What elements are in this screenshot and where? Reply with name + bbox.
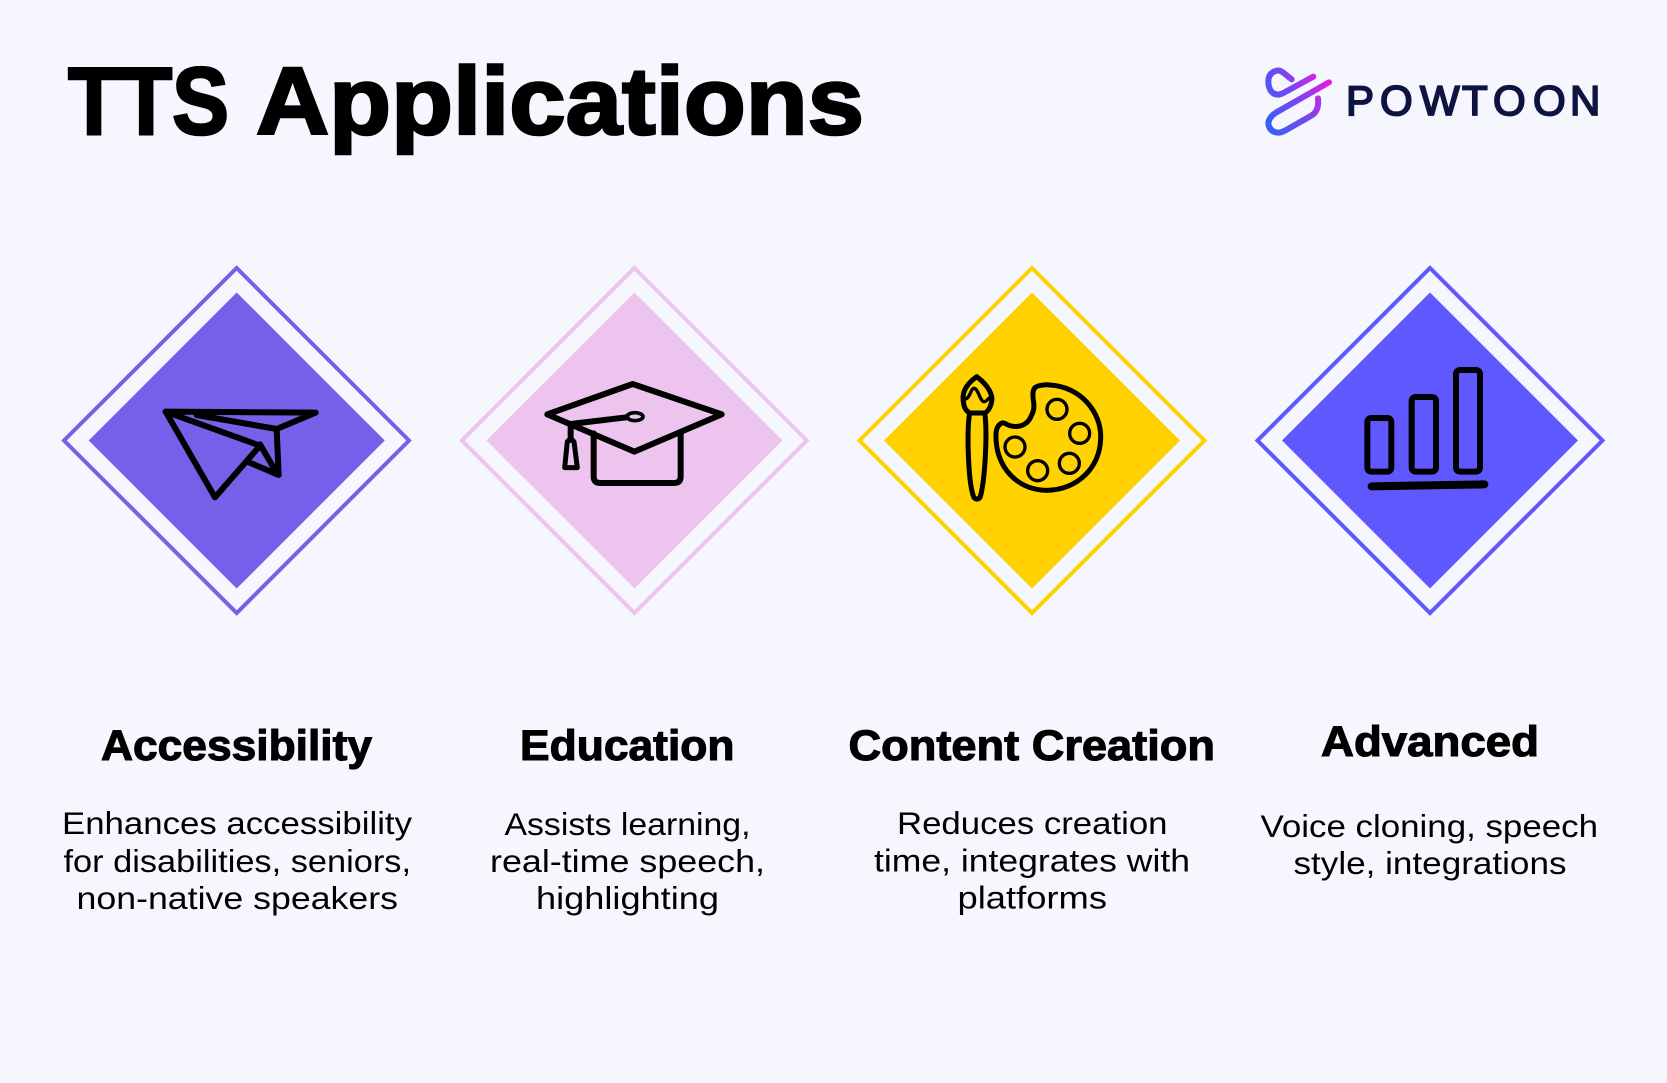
panel: Accessibility bbox=[62, 268, 412, 916]
description: Content Creation: Reduces creation bbox=[897, 805, 1168, 841]
description: Accessibility bbox=[62, 805, 412, 916]
diamond: Content Creation bbox=[860, 268, 1204, 613]
heading: Content Creation: Content Creation bbox=[848, 722, 1215, 770]
logo wordmark: POWTOON bbox=[1346, 77, 1600, 124]
description: Content Creation: time, integrates with bbox=[874, 842, 1190, 878]
title: TTS bbox=[68, 48, 229, 155]
icon: Powtoon mark bbox=[1268, 71, 1329, 133]
description: Accessibility: for disabilities, seniors, bbox=[64, 843, 411, 879]
description: Accessibility: Enhances accessibility bbox=[62, 805, 412, 841]
description: Advanced bbox=[1260, 808, 1598, 881]
description: Advanced: Voice cloning, speech bbox=[1260, 808, 1598, 844]
heading: Accessibility: Accessibility bbox=[101, 722, 372, 770]
diamond: Advanced bbox=[1258, 268, 1602, 613]
diamond: Accessibility bbox=[64, 268, 409, 613]
description: Education: highlighting bbox=[536, 880, 719, 916]
description: Accessibility: non-native speakers bbox=[76, 880, 398, 916]
description: Content Creation bbox=[874, 805, 1190, 916]
panel: Content Creation bbox=[848, 268, 1215, 916]
title: Applications bbox=[256, 48, 864, 155]
logo: Powtoon bbox=[1268, 71, 1600, 133]
icon: bar chart bbox=[1367, 370, 1484, 486]
icon: graduation cap bbox=[547, 384, 722, 483]
description: Education: real-time speech, bbox=[490, 843, 765, 879]
description: Education bbox=[490, 806, 765, 916]
panel: Advanced bbox=[1258, 268, 1602, 881]
description: Content Creation: platforms bbox=[958, 880, 1107, 916]
panel: Education bbox=[462, 268, 807, 916]
description: Advanced: style, integrations bbox=[1294, 845, 1566, 881]
icon: paper plane bbox=[166, 412, 316, 497]
heading: Education: Education bbox=[520, 722, 734, 770]
heading: Advanced: Advanced bbox=[1321, 718, 1539, 766]
icon: paint brush and palette bbox=[963, 377, 1101, 499]
diamond: Education bbox=[462, 268, 807, 613]
description: Education: Assists learning, bbox=[504, 806, 750, 842]
